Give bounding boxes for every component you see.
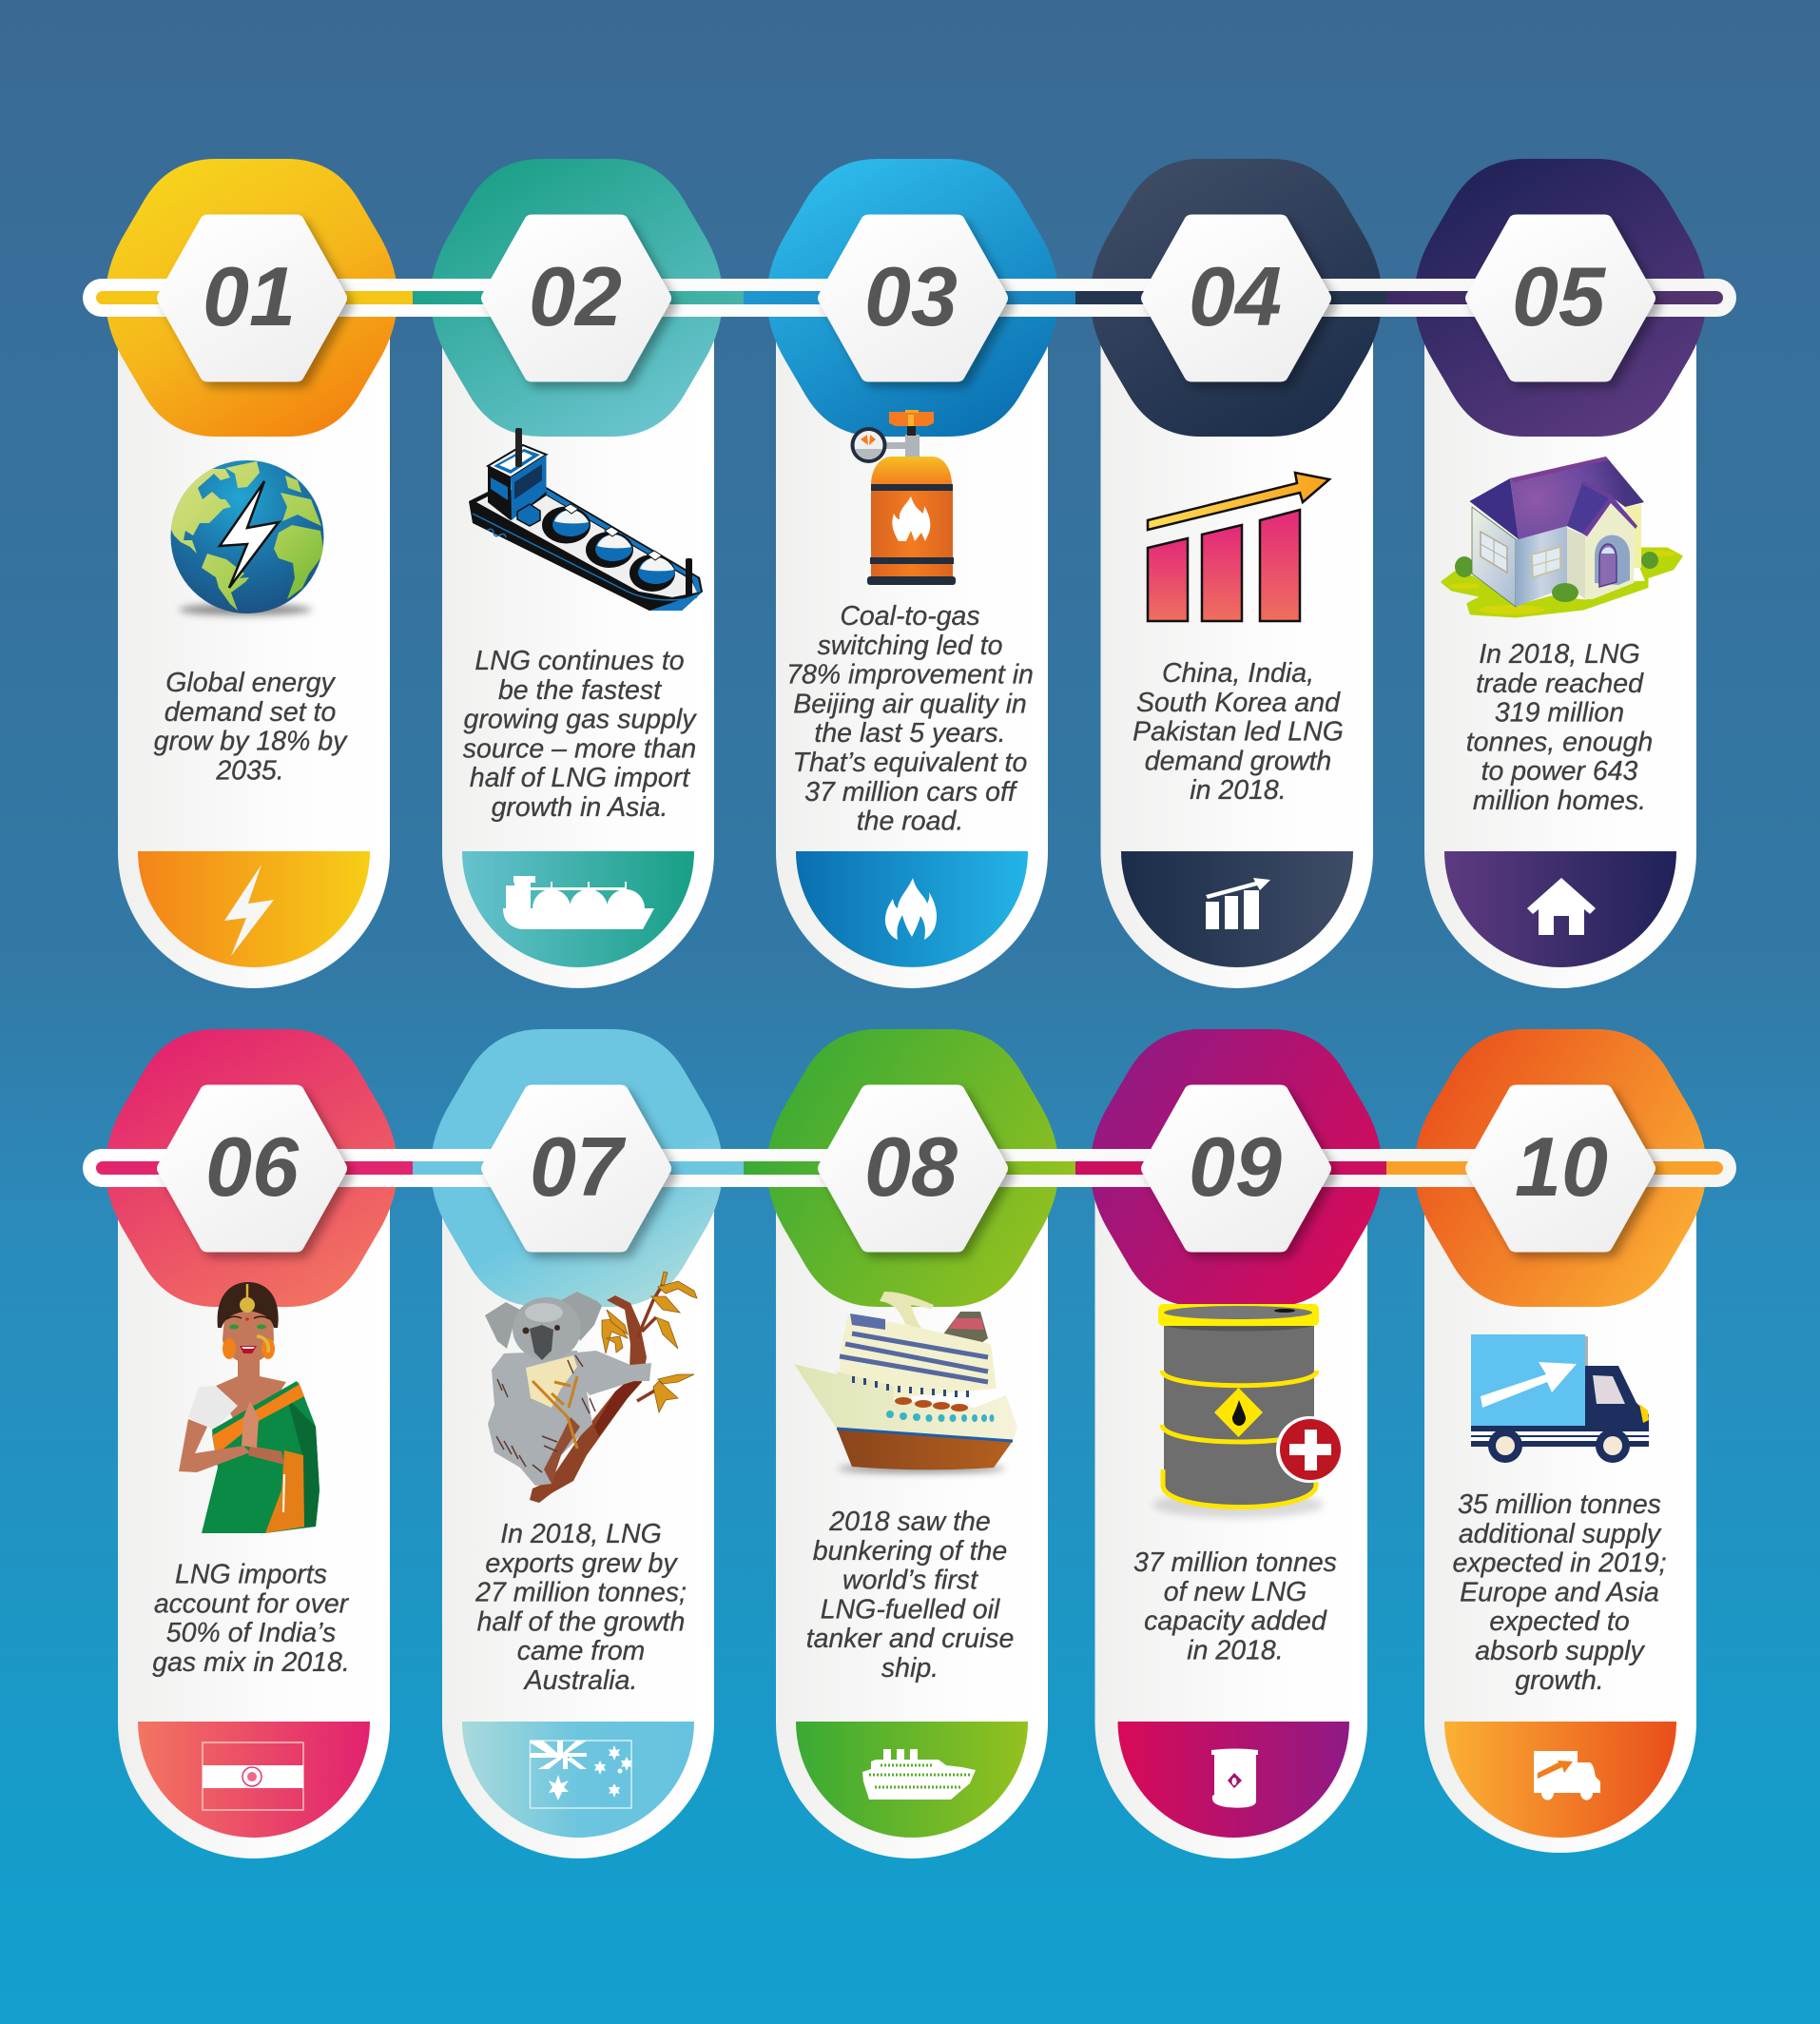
text: card 02: be the fastest — [498, 675, 662, 706]
number badge 09 — [1141, 1084, 1331, 1252]
text: card 09: 37 million tonnes — [1133, 1547, 1337, 1578]
number badge 06 — [157, 1084, 347, 1252]
number badge 10 — [1465, 1084, 1655, 1252]
text: card 06: 50% of India’s — [166, 1618, 336, 1648]
text: card 03: 78% improvement in — [786, 660, 1034, 691]
panel: card 10 — [1414, 1029, 1707, 1853]
icon: oil barrel with plus — [1152, 1304, 1343, 1518]
text: card 06: gas mix in 2018. — [152, 1647, 350, 1678]
panel: card 06 — [106, 1029, 397, 1859]
text: card 10: additional supply — [1459, 1519, 1662, 1549]
text: card 07: Australia. — [523, 1665, 637, 1696]
text: card 08: world’s first — [842, 1566, 978, 1596]
text: card 09: capacity added — [1144, 1606, 1327, 1637]
text: card 05: million homes. — [1473, 786, 1646, 816]
text: card 09: in 2018. — [1187, 1635, 1284, 1665]
icon: India flag — [203, 1742, 303, 1810]
text: card 08: LNG-fuelled oil — [821, 1594, 1000, 1625]
text: card 07: In 2018, LNG — [500, 1519, 662, 1549]
text: card 05: 319 million — [1495, 698, 1624, 729]
number badge 01: 01 — [203, 249, 296, 343]
text: card 07: 27 million tonnes; — [474, 1578, 687, 1608]
panel: card 01 — [106, 159, 397, 988]
text: card 07: half of the growth — [477, 1606, 685, 1637]
text: card 02: growth in Asia. — [492, 792, 668, 823]
number badge 05 — [1465, 215, 1655, 382]
text: card 03: the last 5 years. — [814, 718, 1006, 749]
icon: globe with lightning — [169, 460, 324, 615]
number badge 02: 02 — [529, 249, 622, 343]
panel: card 09 — [1090, 1029, 1383, 1859]
number badge 03 — [818, 215, 1008, 382]
panel: card 07 — [431, 1029, 723, 1859]
number badge 08: 08 — [864, 1119, 958, 1214]
number badge 10: 10 — [1515, 1119, 1608, 1214]
number badge 05: 05 — [1512, 249, 1606, 343]
text: card 05: tonnes, enough — [1466, 727, 1653, 757]
text: card 02: source – more than — [463, 733, 696, 764]
text: card 10: growth. — [1515, 1665, 1604, 1696]
text: card 08: ship. — [881, 1653, 939, 1683]
number badge 06: 06 — [205, 1119, 300, 1214]
number badge 01 — [157, 215, 347, 382]
text: card 08: tanker and cruise — [806, 1624, 1014, 1654]
text: card 01: demand set to — [165, 697, 336, 728]
panel: card 04 — [1090, 159, 1383, 988]
number badge 07: 07 — [530, 1119, 627, 1214]
text: card 08: bunkering of the — [813, 1536, 1007, 1567]
icon: small truck — [1534, 1751, 1600, 1800]
text: card 05: to power 643 — [1481, 756, 1638, 787]
text: card 04: in 2018. — [1190, 775, 1287, 806]
number badge 02 — [481, 215, 671, 382]
panel: card 03 — [766, 159, 1059, 988]
icon: white lightning bolt — [224, 865, 274, 956]
panel: card 02 — [431, 159, 723, 988]
text: card 08: 2018 saw the — [828, 1507, 991, 1537]
icon: delivery truck — [1471, 1334, 1649, 1463]
icon: ship silhouette — [503, 876, 654, 929]
number badge 07 — [481, 1084, 671, 1252]
number badge 09: 09 — [1189, 1119, 1282, 1214]
text: card 07: came from — [517, 1636, 645, 1666]
text: card 10: 35 million tonnes — [1458, 1489, 1661, 1520]
number badge 04 — [1141, 215, 1331, 382]
icon: flame — [885, 878, 937, 940]
text: card 04: South Korea and — [1136, 688, 1341, 718]
icon: small barrel — [1211, 1748, 1258, 1808]
icon: Australia flag — [530, 1741, 632, 1808]
text: card 03: Beijing air quality in — [793, 689, 1027, 719]
number badge 08 — [818, 1084, 1008, 1252]
text: card 03: Coal-to-gas — [840, 601, 980, 632]
text: card 07: exports grew by — [485, 1548, 678, 1579]
text: card 06: account for over — [154, 1588, 350, 1619]
text: card 10: expected in 2019; — [1452, 1548, 1667, 1579]
connector bar: row 1 — [83, 279, 1736, 317]
icon: small house — [1527, 878, 1596, 935]
icon: rising bar chart — [1148, 473, 1329, 621]
number badge 03: 03 — [864, 249, 958, 343]
text: card 03: 37 million cars off — [804, 777, 1018, 808]
text: card 02: half of LNG import — [470, 763, 690, 793]
number badge 04: 04 — [1189, 249, 1282, 343]
icon: gas cylinder — [850, 410, 956, 585]
text: card 05: trade reached — [1476, 669, 1644, 699]
text: card 10: Europe and Asia — [1460, 1577, 1659, 1607]
panel: card 08 — [766, 1029, 1059, 1859]
text: card 03: That’s equivalent to — [793, 748, 1027, 778]
text: card 04: Pakistan led LNG — [1133, 717, 1344, 748]
text: card 02: growing gas supply — [464, 705, 697, 735]
icon: woman in sari — [179, 1282, 319, 1533]
icon: small cruise ship — [862, 1749, 976, 1800]
icon: small chart — [1206, 878, 1270, 929]
text: card 10: expected to — [1489, 1606, 1630, 1637]
text: card 03: switching led to — [818, 631, 1002, 661]
icon: LNG carrier — [469, 428, 703, 611]
icon: cruise ship — [794, 1292, 1017, 1473]
connector bar: row 2 — [83, 1149, 1736, 1187]
icon: house — [1442, 457, 1681, 616]
text: card 01: grow by 18% by — [154, 727, 348, 757]
text: card 06: LNG imports — [175, 1560, 327, 1590]
text: card 09: of new LNG — [1164, 1577, 1307, 1607]
text: card 01: Global energy — [165, 668, 336, 698]
text: card 04: China, India, — [1162, 658, 1314, 689]
text: card 04: demand growth — [1145, 746, 1331, 776]
icon: koala on tree — [485, 1272, 697, 1503]
panel: card 05 — [1414, 159, 1707, 988]
text: card 03: the road. — [857, 807, 963, 837]
text: card 10: absorb supply — [1475, 1636, 1645, 1666]
text: card 02: LNG continues to — [474, 646, 685, 676]
text: card 01: 2035. — [215, 755, 284, 786]
text: card 05: In 2018, LNG — [1479, 639, 1640, 670]
